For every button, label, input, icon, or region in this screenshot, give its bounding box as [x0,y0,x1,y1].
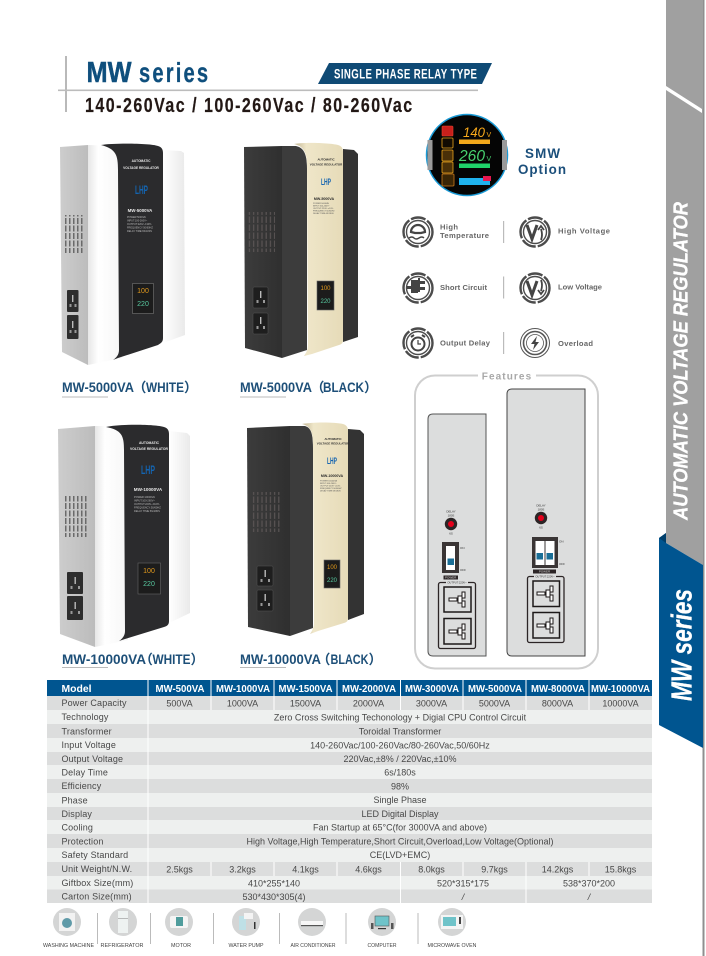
row: power capacity: 2000VA [353,698,384,708]
row: output voltage [47,752,652,765]
row: unit weight: 4.1kgs [292,864,319,874]
product: MW-10000VA white: OUTPUT:220V~±10% [134,502,160,506]
row: power capacity: 5000VA [479,698,510,708]
row: unit weight: 4.6kgs [355,864,382,874]
label: MW-10000VA white: MW-10000VA [62,652,146,667]
label: MW-5000VA black: MW-5000VA [240,380,312,395]
feature: high voltage: High Voltage [558,226,610,236]
feature: short circuit: Short Circuit [440,283,487,292]
table header row: Model [62,684,92,695]
row: carton size: 530*430*305(4) [242,892,306,902]
product: MW-5000VA black: 100 [320,286,331,292]
side band: blue tab: MW series [666,589,698,701]
product: MW-10000VA white [58,425,190,647]
panel: small unit rear: ON [460,546,464,550]
SMW option text: SMW [525,146,560,161]
product: MW-10000VA black: INPUT:100-260V~ [320,483,338,485]
row: output voltage: 220Vac,±8% / 220Vac,±10% [343,754,457,764]
feature: short circuit [404,274,487,302]
badge: single phase relay type [318,63,492,84]
product: MW-10000VA white: DELAY TIME:6S/180S [134,509,160,513]
row: safety standard: CE(LVD+EMC) [370,850,430,860]
row: display: LED Digital Display [361,809,439,819]
row: unit weight: 9.7kgs [481,864,508,874]
label: MW-5000VA black: BLACK [323,380,364,395]
row: power capacity: 3000VA [416,698,447,708]
product: MW-5000VA black: 220 [320,299,331,305]
side band: grey [666,0,704,956]
label: MW-5000VA white: ） [184,380,197,395]
feature dividers [503,221,504,354]
product: MW-10000VA black: AUTOMATIC [324,437,342,441]
row: power capacity: 10000VA [602,698,639,708]
appliance: washing machine: WASHING MACHINE [43,943,94,949]
panel: large unit rear: 6S [539,526,543,530]
appliance: water pump: WATER PUMP [228,943,264,949]
product: MW-10000VA black: DELAY TIME:6S/180S [320,490,341,492]
label: MW-5000VA black: （ [311,380,324,395]
product: MW-10000VA black: FREQUENCY:50/60HZ [320,488,342,490]
label: MW-5000VA white: （ [133,380,146,395]
product: MW-5000VA black: AUTOMATIC [317,158,335,162]
product: MW-5000VA white [60,144,185,365]
product: MW-10000VA black: VOLTAGE REGULATOR [317,442,350,446]
feature: high temperature: High [440,222,458,232]
product: MW-5000VA white: INPUT:100-260V~ [127,220,148,222]
product: MW-5000VA black: FREQUENCY:50/60HZ [313,210,335,212]
SMW display option [426,114,508,196]
features frame: Features [482,372,532,382]
appliance: computer: COMPUTER [368,943,396,949]
header rules [58,56,478,112]
subtitle: voltage ranges: 140-260Vac / 100-260Vac / 80-260Vac [85,94,412,116]
product: MW-10000VA white: MW-10000VA [134,487,163,492]
panel: large unit rear: OFF [559,562,565,566]
badge: single phase relay type: SINGLE PHASE RELAY TYPE [334,67,477,82]
product: MW-5000VA black: MW-5000VA [314,197,335,201]
product: MW-5000VA white: 100 [137,288,149,295]
row: cooling [47,820,652,834]
product: MW-10000VA black [247,422,364,636]
title [86,57,208,89]
row: phase [47,793,652,807]
label: MW-10000VA black: BLACK [330,652,369,667]
row: technology [47,710,652,724]
label: MW-10000VA white: （ [140,652,153,667]
product: MW-10000VA white: INPUT:100-260V~ [134,498,155,502]
row: protection: Protection [62,836,104,846]
label: MW-10000VA black: MW-10000VA [240,652,321,667]
feature: overload: Overload [558,339,593,348]
table header row: MW-5000VA [468,684,522,695]
row: safety standard [47,848,652,862]
row: input voltage: Input Voltage [62,740,116,750]
row: unit weight: Unit Weight/N.W. [62,864,132,874]
appliance: motor: MOTOR [171,943,191,949]
side band: blue tab [659,533,703,748]
row: protection: High Voltage,High Temperature,Short Circuit,Overload,Low Voltage(Optional) [246,836,554,846]
product: MW-5000VA black: VOLTAGE REGULATOR [310,162,343,166]
row: giftbox size: 538*370*200 [563,878,615,888]
product: MW-10000VA black: LHP [327,456,337,467]
product: MW-5000VA white: POWER:5000VA [127,216,146,219]
product: MW-10000VA white: 220 [143,581,155,588]
row: input voltage [47,738,652,752]
row: unit weight: 2.5kgs [166,864,193,874]
panel: small unit rear: OFF [460,568,466,572]
label: MW-10000VA black: ） [368,652,382,667]
product: MW-10000VA black: OUTPUT:220V~±10% [320,486,340,488]
table header row: MW-10000VA [591,684,650,695]
panel: small unit rear [428,414,486,656]
product: MW-5000VA white: OUTPUT:220V~±10% [127,223,152,226]
table header row [47,680,652,696]
row: transformer: Transformer [62,726,112,736]
product: MW-10000VA black: MW-10000VA [321,474,344,478]
appliance: washing machine [43,908,94,949]
appliance: air conditioner [290,908,336,949]
specification table [47,680,652,903]
product: MW-5000VA white: AUTOMATIC [132,159,151,163]
row: input voltage: 140-260Vac/100-260Vac/80-260Vac,50/60Hz [310,740,490,750]
row: cooling: Cooling [62,822,93,832]
appliance: water pump [228,908,264,949]
features frame [415,370,598,668]
appliance: refrigerator [100,908,144,949]
row: efficiency: 98% [391,782,409,792]
table header row: MW-500VA [156,684,204,695]
row: transformer [47,724,652,738]
appliance: computer [368,908,396,949]
product: MW-10000VA white: LHP [141,463,155,477]
panel: large unit rear [507,389,585,656]
SMW option text: Option [518,162,566,177]
product: MW-5000VA black: LHP [321,177,331,188]
label: MW-5000VA black [240,380,377,398]
product: MW-5000VA white: 220 [137,301,149,308]
row: unit weight: 3.2kgs [229,864,256,874]
row: protection [47,834,652,848]
table header row: MW-1500VA [278,684,332,695]
product: MW-5000VA white: DELAY TIME:6S/180S [127,230,152,233]
panel: small unit rear: OUTPUT:220V~ [447,580,467,584]
row: power capacity: 500VA [166,698,193,708]
row: display [47,807,652,820]
table header row: MW-8000VA [531,684,585,695]
row: giftbox size [47,876,652,890]
feature: overload [520,328,593,358]
label: MW-10000VA white: WHITE [152,652,191,667]
product: MW-5000VA black: DELAY TIME:6S/180S [313,212,334,215]
appliance: refrigerator: REFRIGERATOR [100,943,144,949]
row: power capacity: 1500VA [290,698,321,708]
row: power capacity: 8000VA [542,698,573,708]
label: MW-10000VA white: ） [190,652,204,667]
panel: large unit rear: POWER [539,570,551,574]
feature: high temperature [404,218,489,246]
row: carton size [47,890,652,903]
side band: vertical category text: AUTOMATIC VOLTAGE REGULATOR [670,202,692,521]
row: delay time: 6s/180s [384,768,416,778]
row: carton size: Carton Size(mm) [62,892,132,902]
label: MW-5000VA white [62,380,197,398]
product: MW-5000VA white: VOLTAGE REGULATOR [123,166,160,170]
appliance: microwave oven [428,908,476,949]
product: MW-10000VA black: 100 [327,565,338,571]
appliance: microwave oven: MICROWAVE OVEN [428,943,476,949]
feature: low voltage [520,274,602,302]
row: carton size: / [461,892,466,902]
product: MW-5000VA white: FREQUENCY:50/60HZ [127,226,153,230]
panel: large unit rear: OUTPUT:220V~ [535,574,555,578]
product: MW-10000VA black: 220 [327,578,338,584]
feature: low voltage: Low Voltage [558,282,602,292]
row: giftbox size: 520*315*175 [437,878,489,888]
panel: small unit rear: POWER [445,576,457,580]
SMW display option: V [486,132,492,139]
row: power capacity [47,696,652,710]
appliance dividers [97,913,418,944]
label: MW-10000VA black [240,652,382,668]
row: power capacity: Power Capacity [62,698,127,708]
row: cooling: Fan Startup at 65°C(for 3000VA and above) [313,822,487,832]
feature: high temperature: Temperature [440,231,489,240]
row: giftbox size: 410*255*140 [248,878,300,888]
SMW display option: V [486,156,492,163]
SMW display option: 140 [463,124,485,140]
product: MW-10000VA white: VOLTAGE REGULATOR [130,447,169,451]
row: efficiency: Efficiency [62,781,102,791]
label: MW-10000VA white [62,652,204,668]
product: MW-5000VA black: INPUT:100-260V~ [313,206,331,208]
row: unit weight [47,862,652,876]
table header row: MW-2000VA [342,684,396,695]
product: MW-5000VA black: OUTPUT:220V~±10% [313,208,333,210]
feature: output delay: Output Delay [440,338,491,348]
panel: small unit rear: DELAY [446,510,456,514]
row: unit weight: 14.2kgs [542,864,574,874]
appliance: motor [165,908,193,949]
row: delay time [47,765,652,779]
row: transformer: Toroidal Transformer [359,726,441,736]
row: unit weight: 15.8kgs [605,864,637,874]
row: safety standard: Safety Standard [62,850,128,860]
row: technology: Technology [62,712,109,722]
appliance: air conditioner: AIR CONDITIONER [290,943,336,949]
row: output voltage: Output Voltage [62,754,123,764]
row: display: Display [62,809,92,819]
row: technology: Zero Cross Switching Techonology + Digial CPU Control Circuit [274,712,527,722]
product: MW-5000VA white: LHP [135,183,148,197]
row: delay time: Delay Time [62,768,108,778]
panel: large unit rear: ON [559,540,564,544]
product: MW-5000VA white: MW-5000VA [128,208,153,213]
row: unit weight: 8.0kgs [418,864,445,874]
label: MW-5000VA black: ） [364,380,377,395]
panel: small unit rear: 180S [448,514,454,518]
table header row: MW-3000VA [405,684,459,695]
label: MW-5000VA white: WHITE [146,380,184,395]
feature: high voltage [520,218,610,246]
SMW display option: 260 [458,148,485,165]
title: series [139,58,208,89]
row: giftbox size: Giftbox Size(mm) [62,878,133,888]
feature: output delay [404,328,491,358]
panel: large unit rear: 180S [538,508,544,512]
panel: large unit rear: DELAY [536,504,546,508]
row: phase: Single Phase [373,795,427,805]
product: MW-5000VA black [244,143,358,358]
title: MW [86,57,132,89]
panel: small unit rear: 6S [449,532,453,536]
product: MW-10000VA white: 100 [143,568,155,575]
SMW option text [518,146,566,177]
row: carton size: / [587,892,592,902]
label: MW-10000VA black: （ [317,652,330,667]
row: phase: Phase [62,796,88,806]
product: MW-10000VA white: FREQUENCY:50/60HZ [134,506,161,510]
product: MW-10000VA white: AUTOMATIC [139,441,160,445]
row: power capacity: 1000VA [227,698,258,708]
product: MW-10000VA white: POWER:10000VA [134,495,155,499]
product: MW-10000VA black: POWER:10000VA [320,480,337,482]
label: MW-5000VA white: MW-5000VA [62,380,134,395]
row: efficiency [47,779,652,793]
table header row: MW-1000VA [216,684,270,695]
product: MW-5000VA black: POWER:5000VA [313,202,329,205]
